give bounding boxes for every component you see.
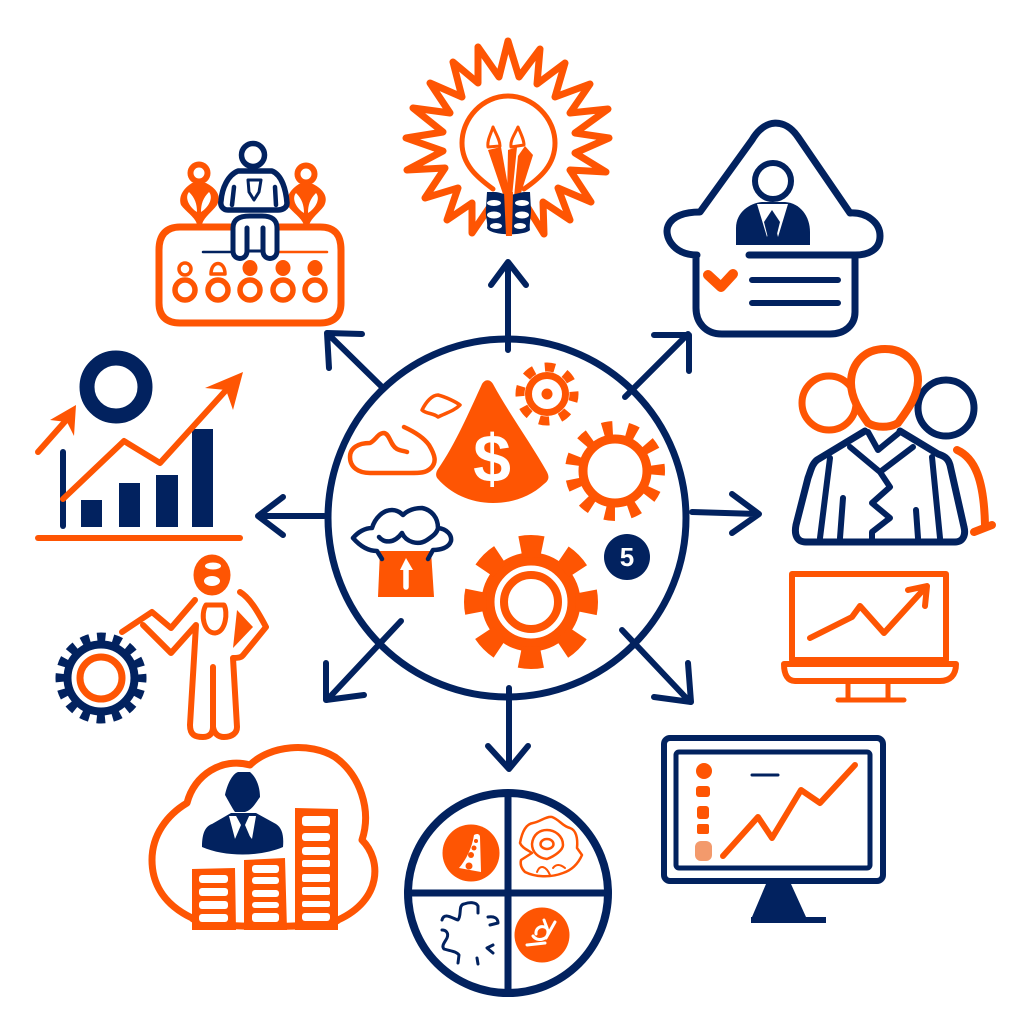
icon: light bulb with sun rays: [406, 41, 609, 236]
icon: profile house card: [667, 123, 880, 334]
side figures: [180, 164, 326, 225]
arrows radiating from hub: [258, 262, 759, 769]
icon: laptop with trend line: [784, 574, 956, 700]
quadrant icons: [442, 817, 582, 964]
audience figures: [175, 260, 325, 300]
icon: monitor with trend: [664, 738, 883, 923]
icon: cloud with person and coin stacks: [152, 748, 375, 930]
icon: presenter on table with audience: [159, 144, 341, 323]
icon: small gear top: [518, 365, 576, 423]
presenter: [221, 144, 287, 258]
icon: dollar coin: 5: [620, 542, 634, 572]
icon: money cone: [436, 380, 548, 503]
icon: cloud with upload box: [353, 508, 451, 597]
icon: group of three people: [795, 349, 992, 542]
icon: medium gear right: [566, 422, 664, 520]
icon: small clouds: [350, 395, 460, 473]
icon: growth chart with circle: [38, 358, 243, 538]
icon: pie with four quadrants: [408, 793, 608, 993]
icon: presenter with gear: [60, 554, 266, 737]
central circle hub: [328, 339, 686, 697]
icon: large gear bottom: [475, 546, 587, 658]
icon: dollar coin: [604, 534, 650, 580]
icon: money cone: $: [473, 421, 511, 497]
